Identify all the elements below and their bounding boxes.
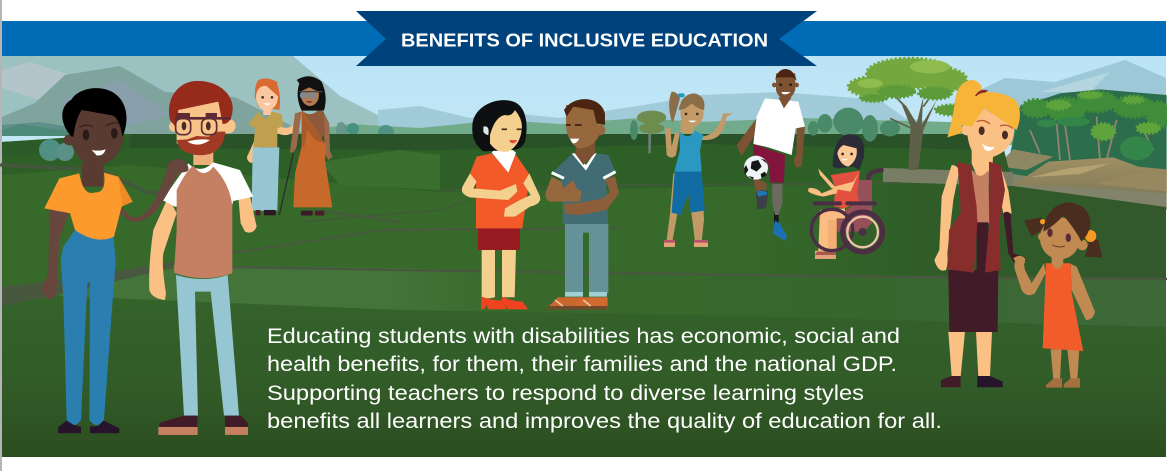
title ribbon xyxy=(356,11,817,66)
figure: man with red hair and glasses xyxy=(149,81,257,435)
body text xyxy=(267,325,942,433)
foreground meadow xyxy=(2,296,1166,457)
title: BENEFITS OF INCLUSIVE EDUCATION xyxy=(401,30,768,50)
figure: man in teal shirt signing xyxy=(546,99,619,310)
body text: Educating students with disabilities has economic, social and xyxy=(267,325,900,348)
figure: footballer with prosthetic leg xyxy=(737,69,805,241)
figure: woman in orange top xyxy=(42,88,189,433)
body text: health benefits, for them, their families and the national GDP. xyxy=(267,353,897,376)
small bushes xyxy=(39,139,61,161)
body text: benefits all learners and improves the quality of education for all. xyxy=(267,410,942,433)
body text: Supporting teachers to respond to diverse learning styles xyxy=(267,382,864,405)
lighter meadow xyxy=(60,265,1166,327)
acacia tree xyxy=(848,58,972,170)
figure: blonde woman xyxy=(934,80,1025,387)
figure: girl in wheelchair xyxy=(808,134,883,259)
figure: woman in red top signing xyxy=(462,100,540,309)
far field xyxy=(2,134,1166,457)
blue header bar xyxy=(2,21,1166,56)
figure: woman with white cane and woman holding her arm xyxy=(247,76,333,216)
footpaths xyxy=(2,165,1166,279)
football xyxy=(744,156,768,180)
figure: girl in orange dress xyxy=(1013,202,1102,388)
mid-distance trees xyxy=(630,108,900,153)
figure: woman in blue top waving xyxy=(664,92,733,247)
right forest xyxy=(883,89,1167,210)
